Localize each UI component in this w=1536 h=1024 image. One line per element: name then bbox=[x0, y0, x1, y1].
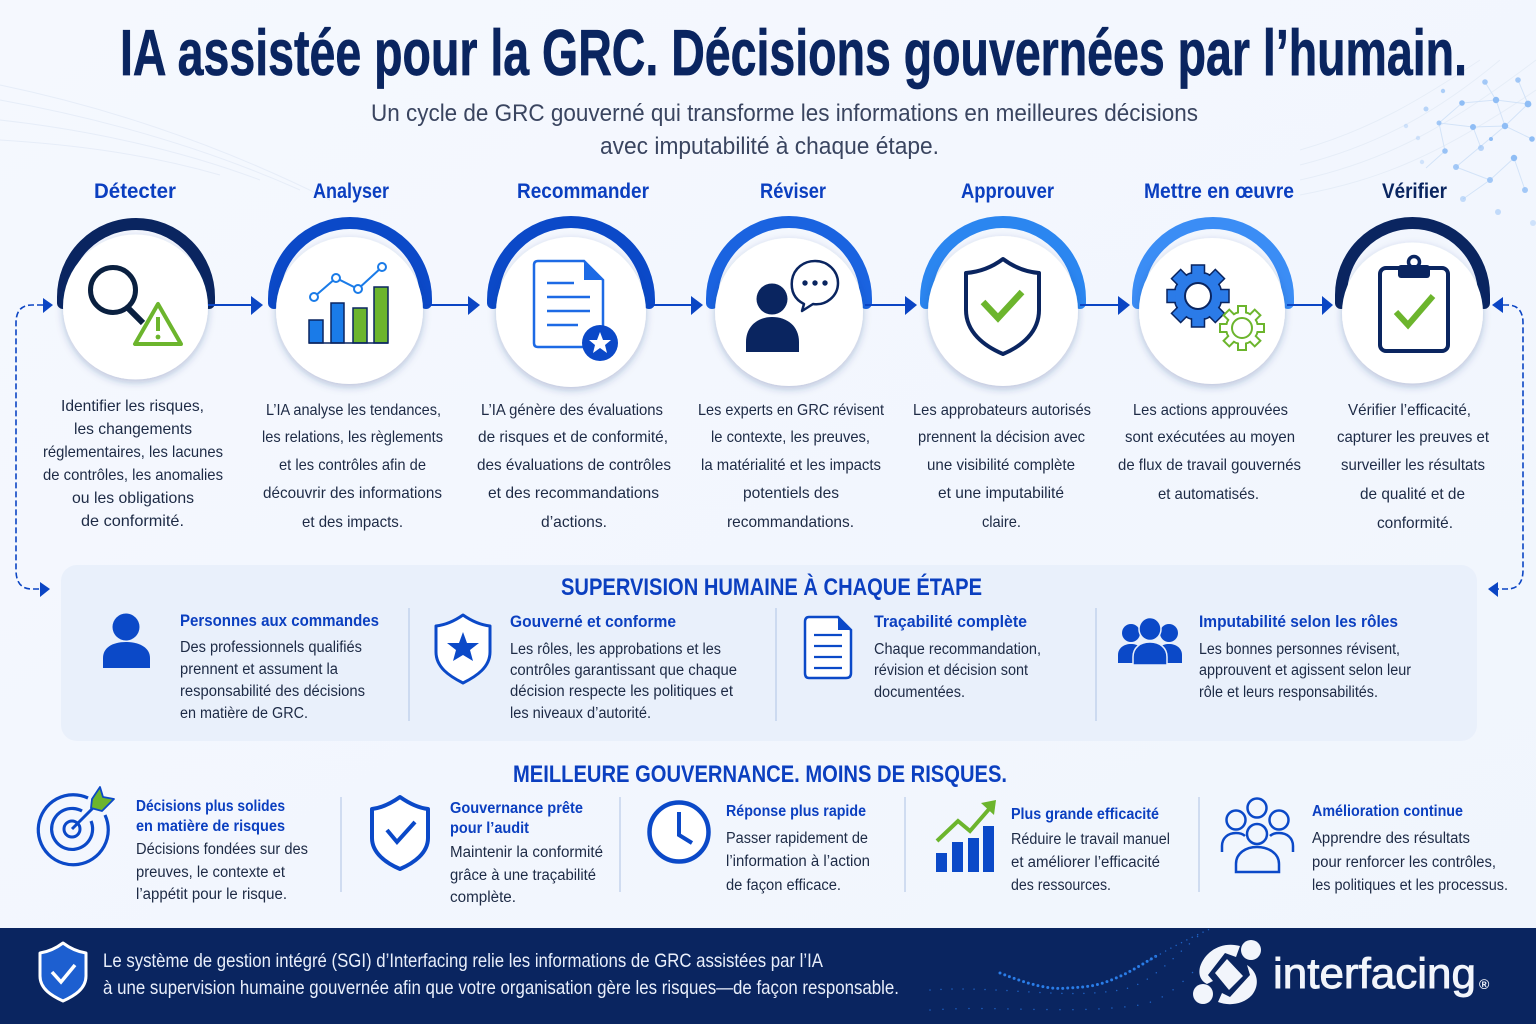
step: Analyser: Analyser bbox=[313, 180, 389, 203]
text: Détecter description: ou les obligations bbox=[72, 490, 194, 507]
oversight item: Personnes aux commandes: responsabilité des décisions bbox=[180, 683, 365, 700]
text: Vérifier description: Vérifier l’efficacité, bbox=[1348, 402, 1471, 419]
footer statement bbox=[103, 950, 899, 999]
text: Vérifier description: capturer les preuves et bbox=[1337, 429, 1490, 446]
text: Recommander description: de risques et de conformité, bbox=[478, 429, 668, 446]
text: Détecter description: les changements bbox=[74, 421, 192, 438]
text: Réviser description: la matérialité et les impacts bbox=[701, 457, 881, 474]
benefit: Décisions plus solides: Décisions plus solides bbox=[136, 798, 285, 815]
oversight item: Gouverné et conforme: Gouverné et conforme bbox=[510, 612, 676, 631]
icon: footer shield bbox=[40, 943, 86, 1001]
benefit: Gouvernance prête pour l’audit: pour l’audit bbox=[450, 820, 529, 837]
footer statement: à une supervision humaine gouvernée afin que votre organisation gère les risques—de façon responsable. bbox=[103, 977, 899, 999]
oversight item: Personnes aux commandes: Des professionnels qualifiés bbox=[180, 639, 362, 656]
benefit: Plus grande efficacité bbox=[1011, 806, 1170, 894]
icon: expert with speech bubble bbox=[746, 261, 838, 352]
icon: clock bbox=[650, 802, 708, 862]
step: Mettre en œuvre: Mettre en œuvre bbox=[1144, 180, 1294, 203]
oversight item: Gouverné et conforme: contrôles garantissant que chaque bbox=[510, 662, 737, 679]
logo: interfacing: interfacing bbox=[1273, 950, 1476, 998]
text: Vérifier description: surveiller les résultats bbox=[1341, 457, 1485, 474]
arrow: left feedback loop bbox=[16, 298, 53, 597]
text: Approuver description: prennent la décision avec bbox=[918, 429, 1085, 446]
text: Analyser description: et les contrôles afin de bbox=[279, 457, 426, 474]
oversight item: Personnes aux commandes: prennent et assument la bbox=[180, 661, 338, 678]
text: Réviser description: recommandations. bbox=[727, 514, 854, 531]
icon: bar chart bbox=[309, 263, 388, 343]
footer band bbox=[0, 928, 1536, 1024]
text: Recommander description: et des recommandations bbox=[488, 485, 659, 502]
text: Approuver description: Les approbateurs autorisés bbox=[913, 402, 1091, 419]
step: Recommander: Recommander bbox=[517, 180, 649, 203]
benefit: Réponse plus rapide: de façon efficace. bbox=[726, 877, 841, 894]
subtitle: Un cycle de GRC gouverné qui transforme les informations en meilleures décisions bbox=[371, 100, 1198, 127]
oversight item: Traçabilité complète: Traçabilité complète bbox=[874, 612, 1027, 631]
benefit: Décisions plus solides: en matière de risques bbox=[136, 818, 285, 835]
text: Mettre en œuvre description bbox=[1118, 402, 1301, 503]
step: Réviser: Réviser bbox=[760, 180, 826, 203]
heading: oversight: SUPERVISION HUMAINE À CHAQUE ÉTAPE bbox=[561, 573, 982, 601]
text: Vérifier description: conformité. bbox=[1377, 515, 1453, 532]
step: Détecter: Détecter bbox=[94, 180, 176, 203]
text: Détecter description: réglementaires, les lacunes bbox=[43, 444, 223, 461]
step: Mettre en œuvre bbox=[1118, 180, 1301, 503]
icon: target bbox=[38, 787, 114, 865]
text: Détecter description: de conformité. bbox=[81, 513, 184, 530]
benefit: Décisions plus solides: Décisions fondées sur des bbox=[136, 841, 308, 858]
oversight item: Imputabilité selon les rôles: Les bonnes personnes révisent, bbox=[1199, 641, 1400, 658]
icon: shield with check bbox=[966, 259, 1039, 354]
footer statement: Le système de gestion intégré (SGI) d’Interfacing relie les informations de GRC assistées par l’IA bbox=[103, 950, 823, 972]
text: Analyser description: les relations, les règlements bbox=[262, 429, 443, 446]
text: Détecter description bbox=[43, 398, 223, 530]
oversight item: Traçabilité complète: documentées. bbox=[874, 684, 965, 701]
text: Mettre en œuvre description: et automatisés. bbox=[1158, 486, 1259, 503]
oversight item: Traçabilité complète bbox=[874, 612, 1041, 701]
benefit: Décisions plus solides: preuves, le contexte et bbox=[136, 864, 286, 881]
text: Vérifier description: de qualité et de bbox=[1360, 486, 1465, 503]
icon: magnifier with warning bbox=[90, 268, 181, 344]
benefit: Réponse plus rapide: l’information à l’action bbox=[726, 853, 870, 870]
icon: team bbox=[1118, 618, 1182, 665]
step: Détecter bbox=[43, 180, 223, 530]
text: Approuver description: une visibilité complète bbox=[927, 457, 1075, 474]
arrows between steps bbox=[208, 296, 1333, 315]
benefit: Amélioration continue: les politiques et les processus. bbox=[1312, 877, 1508, 894]
subtitle bbox=[371, 100, 1198, 160]
icon: clipboard with check bbox=[1380, 256, 1448, 351]
icon: shield with star bbox=[436, 615, 490, 683]
oversight item: Personnes aux commandes bbox=[180, 611, 379, 722]
oversight item: Personnes aux commandes: en matière de GRC. bbox=[180, 705, 308, 722]
text: Approuver description bbox=[913, 402, 1091, 531]
benefit: Plus grande efficacité: Plus grande efficacité bbox=[1011, 806, 1159, 823]
text: Mettre en œuvre description: Les actions approuvées bbox=[1133, 402, 1288, 419]
step: Réviser bbox=[698, 180, 885, 531]
arrow: right feedback loop bbox=[1488, 297, 1523, 597]
text: Analyser description: découvrir des informations bbox=[263, 485, 442, 502]
benefit: Gouvernance prête pour l’audit: Maintenir la conformité bbox=[450, 844, 603, 861]
benefit: Amélioration continue: Apprendre des résultats bbox=[1312, 830, 1470, 847]
icon: growth chart bbox=[936, 800, 996, 872]
icon: shield check bbox=[372, 797, 428, 869]
benefit: Gouvernance prête pour l’audit: Gouvernance prête bbox=[450, 800, 583, 817]
benefit: Plus grande efficacité: et améliorer l’efficacité bbox=[1011, 854, 1160, 871]
step: Vérifier bbox=[1337, 180, 1490, 532]
step: Approuver bbox=[913, 180, 1091, 531]
icon: people circle bbox=[1222, 798, 1293, 872]
panel: human oversight bbox=[61, 565, 1477, 741]
text: Mettre en œuvre description: sont exécutées au moyen bbox=[1125, 429, 1295, 446]
benefit: Réponse plus rapide: Passer rapidement de bbox=[726, 830, 868, 847]
oversight item: Imputabilité selon les rôles: approuvent et agissent selon leur bbox=[1199, 662, 1411, 679]
text: Analyser description: L’IA analyse les tendances, bbox=[266, 402, 441, 419]
text: Recommander description bbox=[477, 402, 671, 531]
text: Réviser description: Les experts en GRC révisent bbox=[698, 402, 885, 419]
icon: gears bbox=[1167, 265, 1264, 350]
text: Vérifier description bbox=[1337, 402, 1490, 532]
benefit: Amélioration continue bbox=[1312, 803, 1508, 894]
text: Analyser description: et des impacts. bbox=[302, 514, 403, 531]
benefit: Réponse plus rapide: Réponse plus rapide bbox=[726, 803, 866, 820]
text: Détecter description: de contrôles, les anomalies bbox=[43, 467, 223, 484]
oversight item: Gouverné et conforme: les niveaux d’autorité. bbox=[510, 705, 651, 722]
text: Recommander description: des évaluations de contrôles bbox=[477, 457, 671, 474]
step: Recommander bbox=[477, 180, 671, 531]
icon: document bbox=[805, 617, 851, 678]
benefits row bbox=[38, 787, 1508, 906]
text: Approuver description: claire. bbox=[982, 514, 1021, 531]
text: Réviser description: le contexte, les preuves, bbox=[711, 429, 870, 446]
logo: interfacing bbox=[1193, 940, 1490, 1004]
logo: interfacing: ® bbox=[1479, 976, 1490, 992]
benefit: Gouvernance prête pour l’audit bbox=[450, 800, 603, 906]
text: Recommander description: d’actions. bbox=[541, 514, 607, 531]
heading: benefits: MEILLEURE GOUVERNANCE. MOINS DE RISQUES. bbox=[513, 761, 1007, 788]
icon: person bbox=[103, 614, 150, 668]
benefit: Gouvernance prête pour l’audit: complète. bbox=[450, 889, 516, 906]
icon: document with star bbox=[534, 261, 618, 361]
oversight item: Imputabilité selon les rôles: Imputabilité selon les rôles bbox=[1199, 612, 1398, 631]
oversight item: Gouverné et conforme: Les rôles, les approbations et les bbox=[510, 641, 721, 658]
oversight item: Imputabilité selon les rôles: rôle et leurs responsabilités. bbox=[1199, 684, 1378, 701]
text: Recommander description: L’IA génère des évaluations bbox=[481, 402, 663, 419]
oversight item: Gouverné et conforme: décision respecte les politiques et bbox=[510, 683, 734, 700]
text: Détecter description: Identifier les risques, bbox=[61, 398, 204, 415]
benefit: Plus grande efficacité: Réduire le travail manuel bbox=[1011, 831, 1170, 848]
text: Mettre en œuvre description: de flux de travail gouvernés bbox=[1118, 457, 1301, 474]
step: Approuver: Approuver bbox=[961, 180, 1054, 203]
benefit: Plus grande efficacité: des ressources. bbox=[1011, 877, 1111, 894]
benefit: Décisions plus solides: l’appétit pour le risque. bbox=[136, 886, 287, 903]
oversight item: Imputabilité selon les rôles bbox=[1199, 612, 1411, 701]
step: Analyser bbox=[262, 180, 443, 531]
text: Réviser description: potentiels des bbox=[743, 485, 839, 502]
oversight item: Traçabilité complète: Chaque recommandation, bbox=[874, 641, 1041, 658]
text: Analyser description bbox=[262, 402, 443, 531]
oversight item: Personnes aux commandes: Personnes aux commandes bbox=[180, 611, 379, 630]
text: Réviser description bbox=[698, 402, 885, 531]
benefit: Gouvernance prête pour l’audit: grâce à une traçabilité bbox=[450, 867, 596, 884]
benefit: Décisions plus solides bbox=[136, 798, 308, 903]
text: Approuver description: et une imputabilité bbox=[938, 485, 1064, 502]
benefit: Amélioration continue: Amélioration continue bbox=[1312, 803, 1463, 820]
step: Vérifier: Vérifier bbox=[1382, 180, 1447, 203]
benefit: Réponse plus rapide bbox=[726, 803, 870, 894]
benefit: Amélioration continue: pour renforcer les contrôles, bbox=[1312, 854, 1496, 871]
oversight item: Gouverné et conforme bbox=[510, 612, 737, 722]
oversight item: Traçabilité complète: révision et décision sont bbox=[874, 662, 1029, 679]
subtitle: avec imputabilité à chaque étape. bbox=[600, 133, 939, 160]
